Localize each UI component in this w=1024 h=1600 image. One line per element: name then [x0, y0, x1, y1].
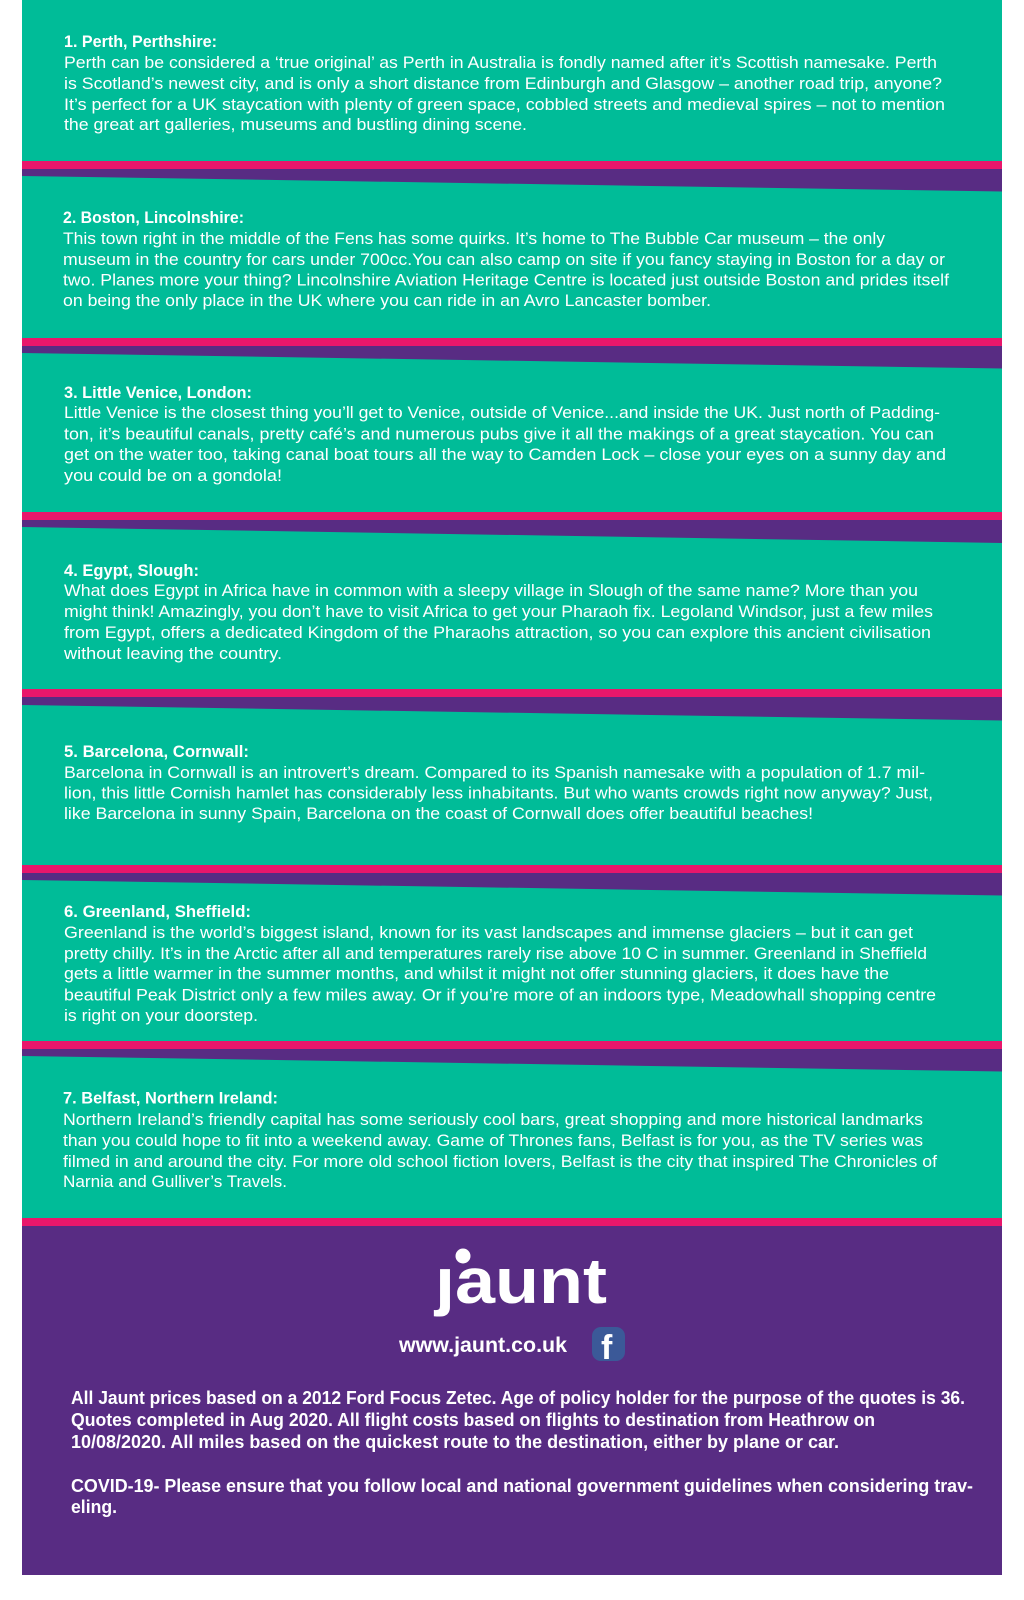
body: Perth: is Scotland’s newest city, and is only a short distance from Edinburgh and Glasgow – another road trip, anyone?	[64, 74, 942, 93]
icon: facebook	[592, 1327, 625, 1367]
body: Little Venice: get on the water too, taking canal boat tours all the way to Camden Lock – close your eyes on a sunny day and	[64, 445, 946, 464]
body: Boston: on being the only place in the UK where you can ride in an Avro Lancaster bomber.	[63, 291, 711, 310]
body: Egypt: What does Egypt in Africa have in common with a sleepy village in Slough of the same name? More than you	[64, 581, 918, 600]
body: Belfast	[63, 1110, 937, 1191]
disclaimer: quote details	[71, 1387, 965, 1452]
panel: green background	[22, 0, 1002, 1226]
icon: facebook: f	[601, 1329, 613, 1367]
body: Little Venice: Little Venice is the closest thing you’ll get to Venice, outside of Venice...and inside the UK. Just north of Padding-	[64, 403, 940, 422]
body: Boston: museum in the country for cars under 700cc.You can also camp on site if you fancy staying in Boston for a day or	[63, 250, 945, 269]
body: Greenland: beautiful Peak District only a few miles away. Or if you’re more of an indoors type, Meadowhall shopping centre	[64, 986, 936, 1004]
body: Barcelona	[64, 763, 933, 823]
body: Greenland: is right on your doorstep.	[64, 1006, 258, 1025]
text block: 5. Barcelona, Cornwall	[64, 743, 933, 823]
text block: 7. Belfast, Northern Ireland	[63, 1090, 937, 1191]
disclaimer: covid note: eling.	[71, 1496, 117, 1517]
body: Barcelona: lion, this little Cornish hamlet has considerably less inhabitants. But who wants crowds right now anyway? Just,	[64, 784, 933, 802]
pink band 4	[22, 689, 1002, 697]
body: Greenland: pretty chilly. It’s in the Arctic after all and temperatures rarely rise above 10 C in summer. Greenland in Sheffield	[64, 944, 927, 963]
body: Belfast: Northern Ireland’s friendly capital has some seriously cool bars, great shopping and more historical landmarks	[63, 1110, 923, 1129]
text block: 1. Perth, Perthshire	[64, 33, 945, 134]
body: Boston	[63, 229, 949, 310]
pink band 6	[22, 1041, 1002, 1049]
body: Egypt: without leaving the country.	[63, 644, 282, 663]
purple wedge 6	[22, 1049, 1002, 1072]
website url: www.jaunt.co.uk	[398, 1334, 567, 1357]
heading: Egypt: 4. Egypt, Slough:	[64, 562, 199, 580]
body: Belfast: Narnia and Gulliver’s Travels.	[63, 1172, 287, 1191]
purple wedge 4	[22, 697, 1002, 720]
body: Egypt: might think! Amazingly, you don’t have to visit Africa to get your Pharaoh fix. Legoland Windsor, just a few miles	[64, 602, 933, 621]
disclaimer: covid note: COVID-19- Please ensure that you follow local and national government guidelines when considering trav-	[71, 1475, 973, 1496]
body: Perth: the great art galleries, museums and bustling dining scene.	[64, 115, 527, 134]
body: Little Venice	[64, 403, 946, 485]
body: Perth	[64, 53, 945, 134]
purple wedge 1	[22, 169, 1002, 192]
body: Little Venice: ton, it’s beautiful canals, pretty café’s and numerous pubs give it all the makings of a great staycation. You can	[64, 424, 934, 444]
panel: footer	[22, 1226, 1002, 1575]
heading: Greenland: 6. Greenland, Sheffield:	[64, 903, 251, 921]
heading: Little Venice: 3. Little Venice, London:	[64, 384, 252, 402]
heading: Perth: 1. Perth, Perthshire:	[64, 33, 217, 51]
pink band 2	[22, 338, 1002, 346]
body: Greenland: gets a little warmer in the summer months, and whilst it might not offer stunning glaciers, it does have the	[64, 964, 889, 983]
body: Boston: This town right in the middle of the Fens has some quirks. It’s home to The Bubble Car museum – the only	[63, 229, 886, 248]
body: Little Venice: you could be on a gondola!	[64, 466, 282, 485]
heading: Belfast: 7. Belfast, Northern Ireland:	[63, 1090, 278, 1108]
body: Barcelona: Barcelona in Cornwall is an introvert’s dream. Compared to its Spanish namesake with a population of 1.7 mil-	[64, 763, 925, 782]
purple wedge 2	[22, 346, 1002, 368]
body: Belfast: than you could hope to fit into a weekend away. Game of Thrones fans, Belfast is for you, as the TV series was	[63, 1131, 923, 1150]
purple wedge 5	[22, 873, 1002, 896]
text block: 2. Boston, Lincolnshire	[63, 209, 949, 310]
disclaimer: quote details: All Jaunt prices based on a 2012 Ford Focus Zetec. Age of policy holder for the purpose of the quotes is 36.	[71, 1387, 965, 1408]
purple wedge 3	[22, 520, 1002, 543]
disclaimer: quote details: Quotes completed in Aug 2020. All flight costs based on flights to destination from Heathrow on	[71, 1409, 875, 1430]
body: Perth: It’s perfect for a UK staycation with plenty of green space, cobbled streets and medieval spires – not to mention	[64, 95, 945, 114]
body: Egypt	[63, 581, 933, 663]
pink band 5	[22, 865, 1002, 873]
body: Perth: Perth can be considered a ‘true original’ as Perth in Australia is fondly named after it’s Scottish namesake. Perth	[64, 53, 937, 72]
disclaimer: covid note	[71, 1475, 973, 1517]
pink band 7	[22, 1218, 1002, 1226]
heading: Boston: 2. Boston, Lincolnshire:	[63, 209, 244, 227]
text block: 6. Greenland, Sheffield	[64, 903, 936, 1025]
text block: 3. Little Venice, London	[64, 384, 946, 485]
body: Greenland	[64, 923, 936, 1025]
body: Barcelona: like Barcelona in sunny Spain, Barcelona on the coast of Cornwall does offer beautiful beaches!	[64, 804, 813, 823]
body: Boston: two. Planes more your thing? Lincolnshire Aviation Heritage Centre is located just outside Boston and prides itself	[63, 270, 949, 290]
body: Belfast: filmed in and around the city. For more old school fiction lovers, Belfast is the city that inspired The Chronicles of	[63, 1152, 937, 1171]
pink band 1	[22, 161, 1002, 169]
logo: jaunt: jaunt	[434, 1245, 607, 1317]
heading: Barcelona: 5. Barcelona, Cornwall:	[64, 743, 249, 761]
body: Egypt: from Egypt, offers a dedicated Kingdom of the Pharaohs attraction, so you can explore this ancient civilisation	[64, 623, 931, 642]
body: Greenland: Greenland is the world’s biggest island, known for its vast landscapes and immense glaciers – but it can get	[64, 923, 913, 942]
text block: 4. Egypt, Slough	[63, 562, 933, 663]
disclaimer: quote details: 10/08/2020. All miles based on the quickest route to the destination, either by plane or car.	[71, 1431, 839, 1452]
pink band 3	[22, 512, 1002, 520]
